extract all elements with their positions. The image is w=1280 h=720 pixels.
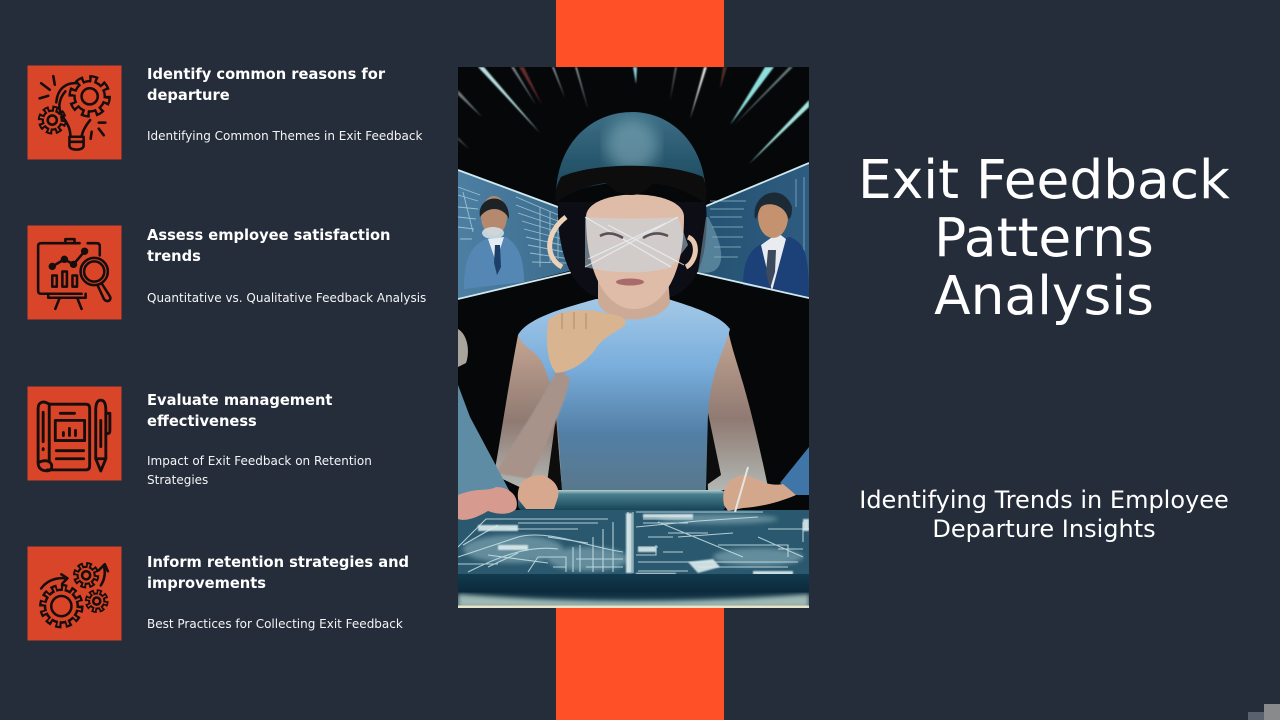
picture: woman at holographic table	[458, 67, 809, 608]
light streaks	[458, 67, 809, 164]
man in left panel	[464, 196, 524, 289]
bare arms	[494, 330, 768, 491]
lips	[616, 278, 644, 286]
heading: identify reasons	[147, 66, 386, 104]
icon: gears with arrows	[28, 546, 122, 640]
text: common themes: Identifying Common Themes in Exit Feedback	[147, 128, 422, 142]
corner mark large	[1264, 704, 1280, 720]
icon: report book and pen	[28, 386, 122, 480]
corner mark small	[1248, 712, 1264, 720]
text: quantitative vs qualitative: Quantitative vs. Qualitative Feedback Analysis	[147, 290, 426, 304]
man in right panel	[743, 192, 809, 297]
subtitle	[859, 486, 1229, 543]
heading: satisfaction trends	[147, 227, 390, 265]
hair	[558, 202, 707, 299]
icon: presentation board with magnifier	[28, 226, 122, 320]
table front rim	[458, 574, 809, 608]
heading: retention strategies: improvements	[147, 575, 266, 592]
table surface	[458, 510, 809, 576]
holographic panel left	[458, 170, 585, 299]
hands of person at left	[458, 487, 517, 520]
visor	[550, 217, 721, 273]
heading: management effectiveness: effectiveness	[147, 413, 257, 430]
heading: satisfaction trends: trends	[147, 248, 201, 265]
pointing hand	[547, 310, 626, 373]
hand left	[518, 475, 558, 509]
text: retention impact	[147, 454, 372, 486]
hand right with pen	[723, 467, 796, 512]
title: Analysis	[934, 264, 1154, 327]
neck	[598, 277, 670, 320]
icon: lightbulb with gears	[28, 66, 122, 160]
text: retention impact: Strategies	[147, 472, 208, 486]
heading: management effectiveness: Evaluate management	[147, 392, 332, 408]
face	[586, 194, 684, 309]
text: retention impact: Impact of Exit Feedback on Retention	[147, 454, 372, 468]
subtitle: Identifying Trends in Employee	[859, 486, 1229, 514]
helmet	[555, 112, 707, 203]
person at right edge	[780, 447, 809, 495]
heading: retention strategies	[147, 554, 409, 592]
heading: identify reasons: departure	[147, 87, 230, 104]
heading: management effectiveness	[147, 392, 332, 430]
title: Patterns	[934, 206, 1154, 269]
person at left edge	[458, 329, 510, 499]
image background	[458, 67, 809, 510]
title	[858, 148, 1230, 327]
title: Exit Feedback	[858, 148, 1230, 211]
shirt	[518, 299, 730, 490]
heading: retention strategies: Inform retention strategies and	[147, 554, 409, 570]
holographic panel right	[696, 162, 809, 299]
heading: satisfaction trends: Assess employee satisfaction	[147, 227, 390, 244]
table edge bar	[518, 490, 726, 511]
raised forearm	[496, 367, 570, 479]
heading: identify reasons: Identify common reasons for	[147, 66, 385, 82]
subtitle: Departure Insights	[932, 515, 1156, 543]
gaps between arms and shirt	[546, 413, 721, 491]
orange vertical band	[556, 0, 724, 720]
text: best practices: Best Practices for Collecting Exit Feedback	[147, 616, 403, 630]
